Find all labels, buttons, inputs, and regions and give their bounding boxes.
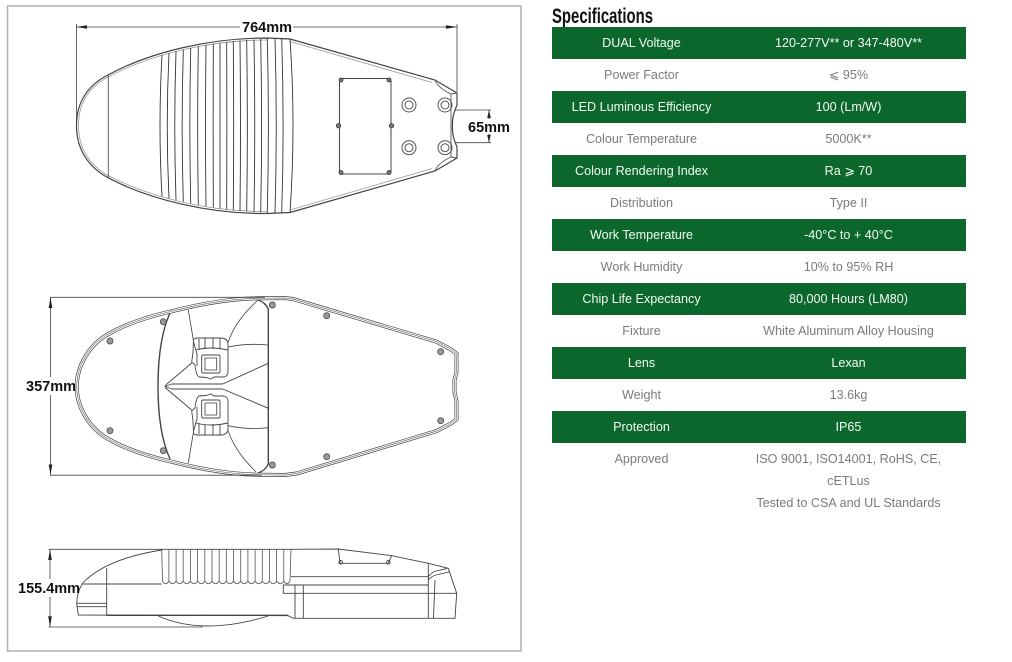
specification row: Chip Life Expectancy — [552, 283, 966, 315]
specification row: Protection — [552, 411, 966, 443]
specification row: Approved: Tested to CSA and UL Standards — [756, 496, 941, 510]
specification row: Work Temperature: Work Temperature — [590, 228, 693, 242]
specification row: Colour Rendering Index: Colour Rendering Index — [575, 164, 708, 178]
specification row: Approved: Approved — [615, 452, 668, 466]
specification row: Distribution — [610, 196, 867, 210]
specification row: Protection: IP65 — [836, 420, 861, 434]
dimension: 764mm — [76, 20, 457, 123]
side view outline — [77, 549, 457, 626]
top view drawing — [76, 38, 457, 214]
heat sink fins — [160, 38, 293, 213]
specification row: DUAL Voltage — [552, 27, 966, 59]
specification row: Fixture — [622, 324, 934, 338]
side view rear section — [283, 549, 457, 618]
specification row: Approved — [614, 452, 941, 510]
dimension: 357mm — [26, 297, 265, 475]
dimension: 65mm — [455, 110, 510, 143]
driver access cover with screws — [336, 78, 394, 174]
specification row: Lens — [552, 347, 966, 379]
specification row: Work Humidity — [600, 260, 893, 274]
dimension: 155.4mm: 155.4mm — [18, 581, 80, 597]
LED module lower — [192, 394, 228, 435]
specification row: Weight: Weight — [622, 388, 661, 402]
dimension: 764mm: 764mm — [242, 20, 292, 36]
specification row: Colour Temperature: Colour Temperature — [586, 132, 697, 146]
dimension: 357mm: 357mm — [26, 379, 76, 395]
specification row: Lens: Lexan — [831, 356, 866, 370]
lens panel — [158, 300, 268, 473]
side view drawing — [77, 549, 457, 626]
specification row: Chip Life Expectancy: 80,000 Hours (LM80) — [789, 292, 908, 306]
specification row: Power Factor: ⩽ 95% — [829, 68, 868, 82]
specification row: Fixture: Fixture — [622, 324, 661, 338]
heading: Specifications: Specifications — [552, 5, 653, 28]
specification row: Lens: Lens — [628, 356, 655, 370]
dimension: 155.4mm — [18, 549, 203, 627]
specification row: Colour Temperature — [586, 132, 872, 146]
specification row: Colour Rendering Index — [552, 155, 966, 187]
specification row: Approved: cETLus — [827, 474, 870, 488]
specification row: Power Factor: Power Factor — [604, 68, 679, 82]
specification row: Colour Temperature: 5000K** — [825, 132, 872, 146]
LED module upper — [192, 338, 228, 379]
housing screws — [107, 302, 444, 468]
top view outline — [76, 38, 457, 214]
mounting bolts — [402, 98, 452, 155]
specification row: Work Humidity: 10% to 95% RH — [804, 260, 893, 274]
specification row: Power Factor — [604, 68, 868, 82]
specification row: Weight — [622, 388, 867, 402]
side view cooling fins — [162, 549, 291, 584]
specification row: Work Temperature: -40°C to + 40°C — [804, 228, 893, 242]
specification row: DUAL Voltage: DUAL Voltage — [602, 36, 681, 50]
specification row: Chip Life Expectancy: Chip Life Expectancy — [582, 292, 701, 306]
specification row: Weight: 13.6kg — [830, 388, 867, 402]
specification row: Work Humidity: Work Humidity — [601, 260, 682, 274]
specification row: Protection: Protection — [613, 420, 670, 434]
specification row: LED Luminous Efficiency: LED Luminous Efficiency — [572, 100, 711, 114]
specification row: Fixture: White Aluminum Alloy Housing — [763, 324, 934, 338]
specification row: Work Temperature — [552, 219, 966, 251]
specification row: Colour Rendering Index: Ra ⩾ 70 — [825, 164, 872, 178]
specification row: DUAL Voltage: 120-277V** or 347-480V** — [775, 36, 922, 50]
underside outline — [77, 298, 456, 475]
dimension: 65mm: 65mm — [468, 120, 510, 136]
specification row: Distribution: Type II — [830, 196, 867, 210]
specification row: LED Luminous Efficiency — [552, 91, 966, 123]
specification row: Distribution: Distribution — [610, 196, 673, 210]
specification row: LED Luminous Efficiency: 100 (Lm/W) — [816, 100, 881, 114]
underside view drawing — [77, 298, 456, 475]
specification row: Approved: ISO 9001, ISO14001, RoHS, CE, — [756, 452, 941, 466]
